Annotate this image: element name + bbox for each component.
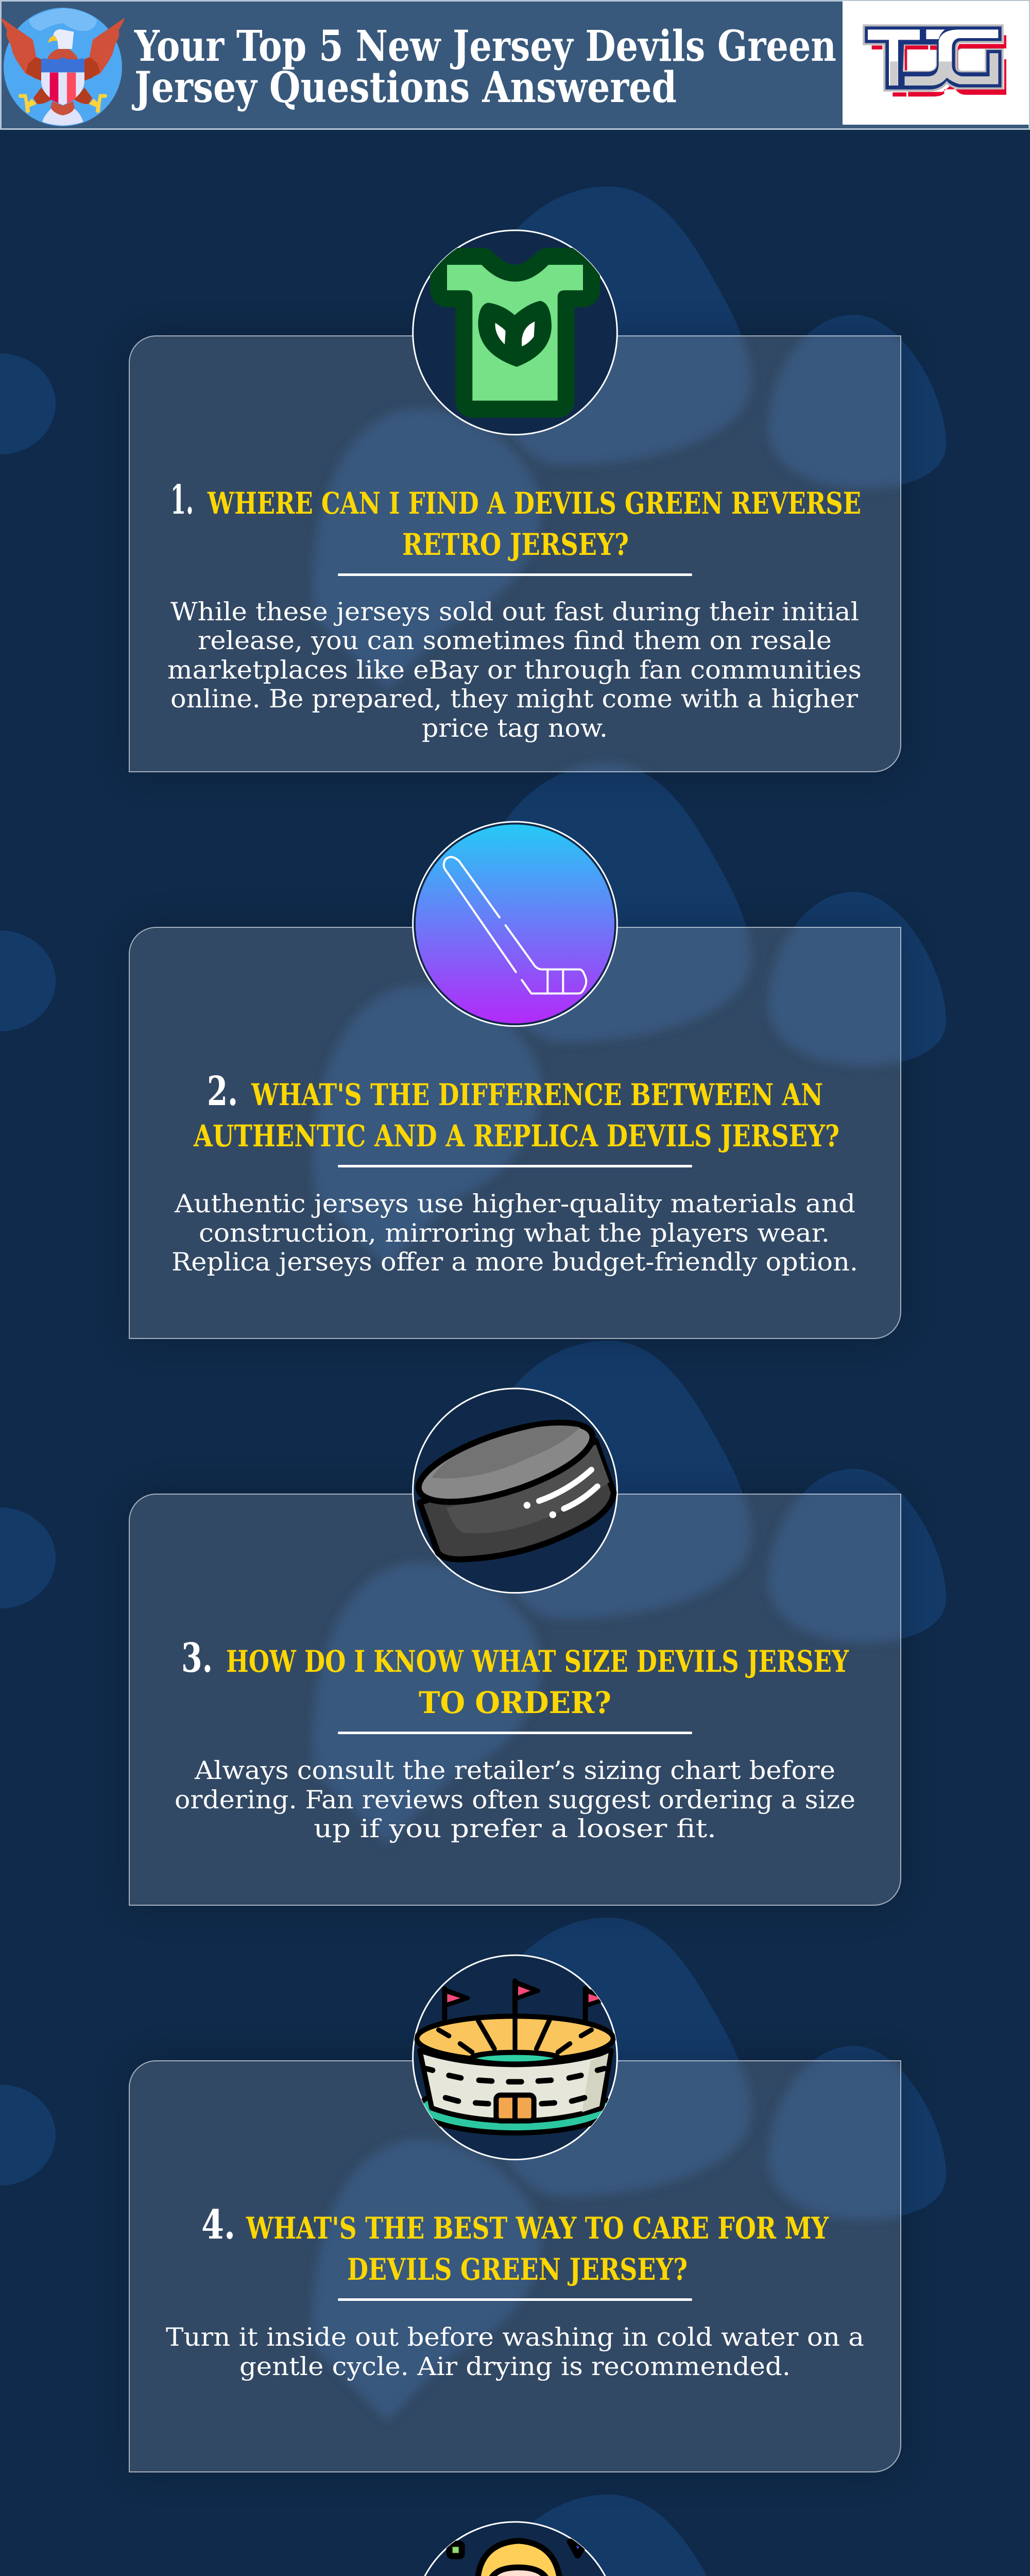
panel: question 1 [128,335,902,773]
icon: hockey puck [412,1388,618,1594]
answer text 1: release, you can sometimes find them on resale [198,626,832,655]
answer text 3 [175,1756,855,1843]
title: Jersey Questions Answered [132,63,677,112]
icon: hockey stick [412,821,618,1027]
answer text 2 [171,1189,858,1277]
heading: question 2: 2. [207,1068,238,1115]
heading: question 4: 4. [201,2201,235,2248]
heading: question 1 [170,477,861,562]
answer text 2: Authentic jerseys use higher-quality materials and [174,1189,855,1218]
answer text 1: marketplaces like eBay or through fan communities [167,655,862,685]
panel: question 3 [128,1493,902,1906]
icon: green t-shirt [412,230,618,436]
heading: question 3: TO ORDER? [419,1685,611,1720]
answer text 1: price tag now. [422,714,608,743]
answer text 1: While these jerseys sold out fast during their initial [170,597,859,626]
heading: question 1: 1. [170,477,194,523]
heading: question 3: 3. [181,1635,213,1682]
answer text 4 [166,2323,864,2381]
answer text 2: construction, mirroring what the players wear. [199,1218,830,1248]
answer text 1: online. Be prepared, they might come with a higher [170,684,859,714]
panel: question 2 [128,926,902,1340]
icon: cheering player [424,2521,606,2576]
heading: question 1: RETRO JERSEY? [402,527,629,562]
answer text 4: gentle cycle. Air drying is recommended. [239,2352,791,2381]
answer text 2: Replica jerseys offer a more budget-friendly option. [171,1247,858,1277]
answer text 3: up if you prefer a looser fit. [314,1814,716,1843]
answer text 3: Always consult the retailer’s sizing chart before [194,1756,835,1785]
title [132,22,836,112]
answer text 3: ordering. Fan reviews often suggest ordering a size [175,1785,855,1815]
panel: question 4 [128,2060,902,2473]
heading: question 3 [181,1635,849,1720]
heading: question 4: DEVILS GREEN JERSEY? [347,2252,688,2287]
heading: question 4 [201,2201,829,2287]
icon: stadium [412,1955,618,2161]
logo: header [843,1,1029,125]
header banner [0,0,1030,130]
icon: eagle with shield [1,8,125,126]
answer text 4: Turn it inside out before washing in cold water on a [166,2323,864,2352]
answer text 1 [167,597,862,743]
heading: question 2 [193,1068,839,1154]
